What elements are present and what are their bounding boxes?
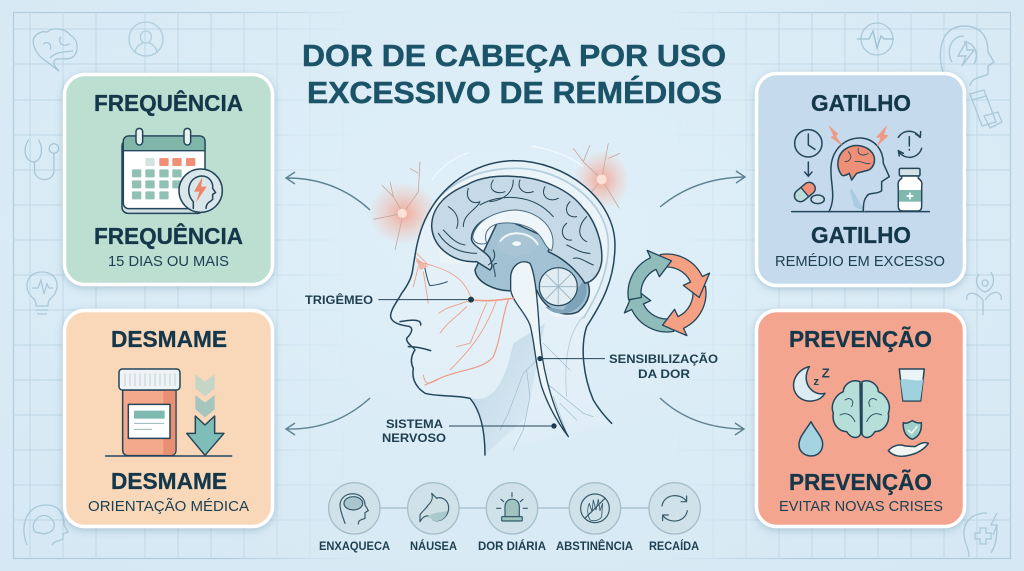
heading: frequência: FREQUÊNCIA bbox=[94, 89, 243, 116]
deep brain bbox=[475, 217, 589, 314]
icon: prevention set: z bbox=[813, 376, 819, 388]
subtitle: REMÉDIO EM EXCESSO bbox=[775, 253, 945, 270]
subtitle: 15 DIAS OU MAIS bbox=[108, 253, 229, 270]
cycle arrows bbox=[624, 250, 710, 336]
icon: ghost tree person bbox=[967, 272, 1001, 315]
panel: frequência bbox=[64, 74, 272, 284]
labels: NÁUSEA bbox=[410, 538, 457, 553]
icon: prevention set: Z bbox=[822, 365, 830, 380]
icon: ghost head bottom left bbox=[24, 505, 68, 545]
icon: abstinência bbox=[569, 483, 621, 534]
central head diagram bbox=[368, 143, 630, 455]
labels: DOR DIÁRIA bbox=[478, 538, 546, 553]
icon: ghost brain top left bbox=[33, 29, 77, 71]
title: EXCESSIVO DE REMÉDIOS bbox=[307, 75, 722, 110]
label: sistema nervoso: SISTEMA bbox=[386, 417, 443, 431]
label: sensibilização da dor: DA DOR bbox=[638, 367, 690, 381]
panel: prevenção bbox=[756, 310, 964, 526]
icon: náusea bbox=[408, 483, 459, 534]
panel: gatilho bbox=[756, 74, 964, 286]
neuron glow left bbox=[368, 153, 468, 250]
icon: calendar bbox=[122, 128, 222, 213]
heading: frequência repeat: FREQUÊNCIA bbox=[94, 222, 243, 249]
icon: ghost light bulb bbox=[27, 272, 57, 314]
arrow: to desmame bbox=[286, 398, 370, 435]
icon: recaída bbox=[649, 483, 700, 534]
icon: ghost head with bolt bbox=[940, 26, 994, 86]
label: sistema nervoso bbox=[382, 417, 446, 445]
sulci bbox=[438, 180, 593, 265]
neck shading bbox=[457, 323, 545, 455]
labels: RECAÍDA bbox=[649, 538, 699, 553]
labels: ENXAQUECA bbox=[319, 539, 390, 553]
icon: ghost head with cross bbox=[964, 513, 997, 557]
labels: ABSTINÊNCIA bbox=[556, 538, 633, 553]
icon: enxaqueca bbox=[329, 483, 380, 534]
icon: ghost pill box bbox=[970, 90, 1002, 128]
cerebrum bbox=[432, 176, 602, 283]
skull band bbox=[435, 169, 608, 317]
icon: dor diária bbox=[486, 483, 538, 534]
head outline bbox=[391, 161, 615, 455]
label: sensibilização da dor: SENSIBILIZAÇÃO bbox=[609, 351, 718, 366]
arrow: to gatilho bbox=[660, 171, 745, 207]
heading: prevenção: PREVENÇÃO bbox=[789, 325, 932, 352]
label: trigêmeo: TRIGÊMEO bbox=[305, 292, 373, 307]
icon: ghost pulse bbox=[857, 23, 894, 55]
heading: gatilho repeat: GATILHO bbox=[811, 222, 911, 248]
cerebellum bbox=[539, 268, 587, 314]
trigeminal nerve branches bbox=[413, 253, 513, 385]
leader trigêmeo bbox=[378, 297, 474, 303]
icon: medicine jar with down arrows bbox=[106, 369, 232, 456]
nerve network bbox=[500, 343, 593, 450]
title: DOR DE CABEÇA POR USO bbox=[302, 38, 726, 73]
heading: desmame: DESMAME bbox=[111, 326, 227, 352]
neuron glow right bbox=[532, 143, 630, 210]
label: sensibilização da dor bbox=[609, 351, 718, 381]
brainstem and spinal cord bbox=[511, 262, 568, 437]
leader sistema nervoso bbox=[449, 423, 557, 429]
subtitle: EVITAR NOVAS CRISES bbox=[779, 498, 943, 515]
leader sensibilização bbox=[537, 356, 605, 361]
title bbox=[302, 38, 726, 110]
arrow: to prevenção bbox=[660, 398, 744, 435]
icon: ghost person bbox=[129, 22, 163, 56]
head silhouette bbox=[391, 161, 615, 455]
corpus callosum bbox=[473, 210, 553, 251]
heading: gatilho: GATILHO bbox=[811, 90, 911, 116]
subtitle: ORIENTAÇÃO MÉDICA bbox=[88, 498, 249, 515]
icon: ghost stethoscope bbox=[25, 140, 59, 180]
panel: desmame bbox=[64, 310, 272, 526]
heading: desmame repeat: DESMAME bbox=[111, 468, 227, 494]
icon: prevention set bbox=[794, 365, 928, 456]
icon: trigger scene bbox=[792, 125, 929, 212]
symptom row bbox=[319, 483, 700, 553]
labels bbox=[319, 538, 699, 553]
label: sistema nervoso: NERVOSO bbox=[382, 431, 446, 445]
thalamus bbox=[488, 233, 538, 277]
heading: prevenção repeat: PREVENÇÃO bbox=[789, 468, 932, 495]
eye bbox=[425, 268, 447, 286]
arrow: to frequência bbox=[286, 172, 370, 210]
